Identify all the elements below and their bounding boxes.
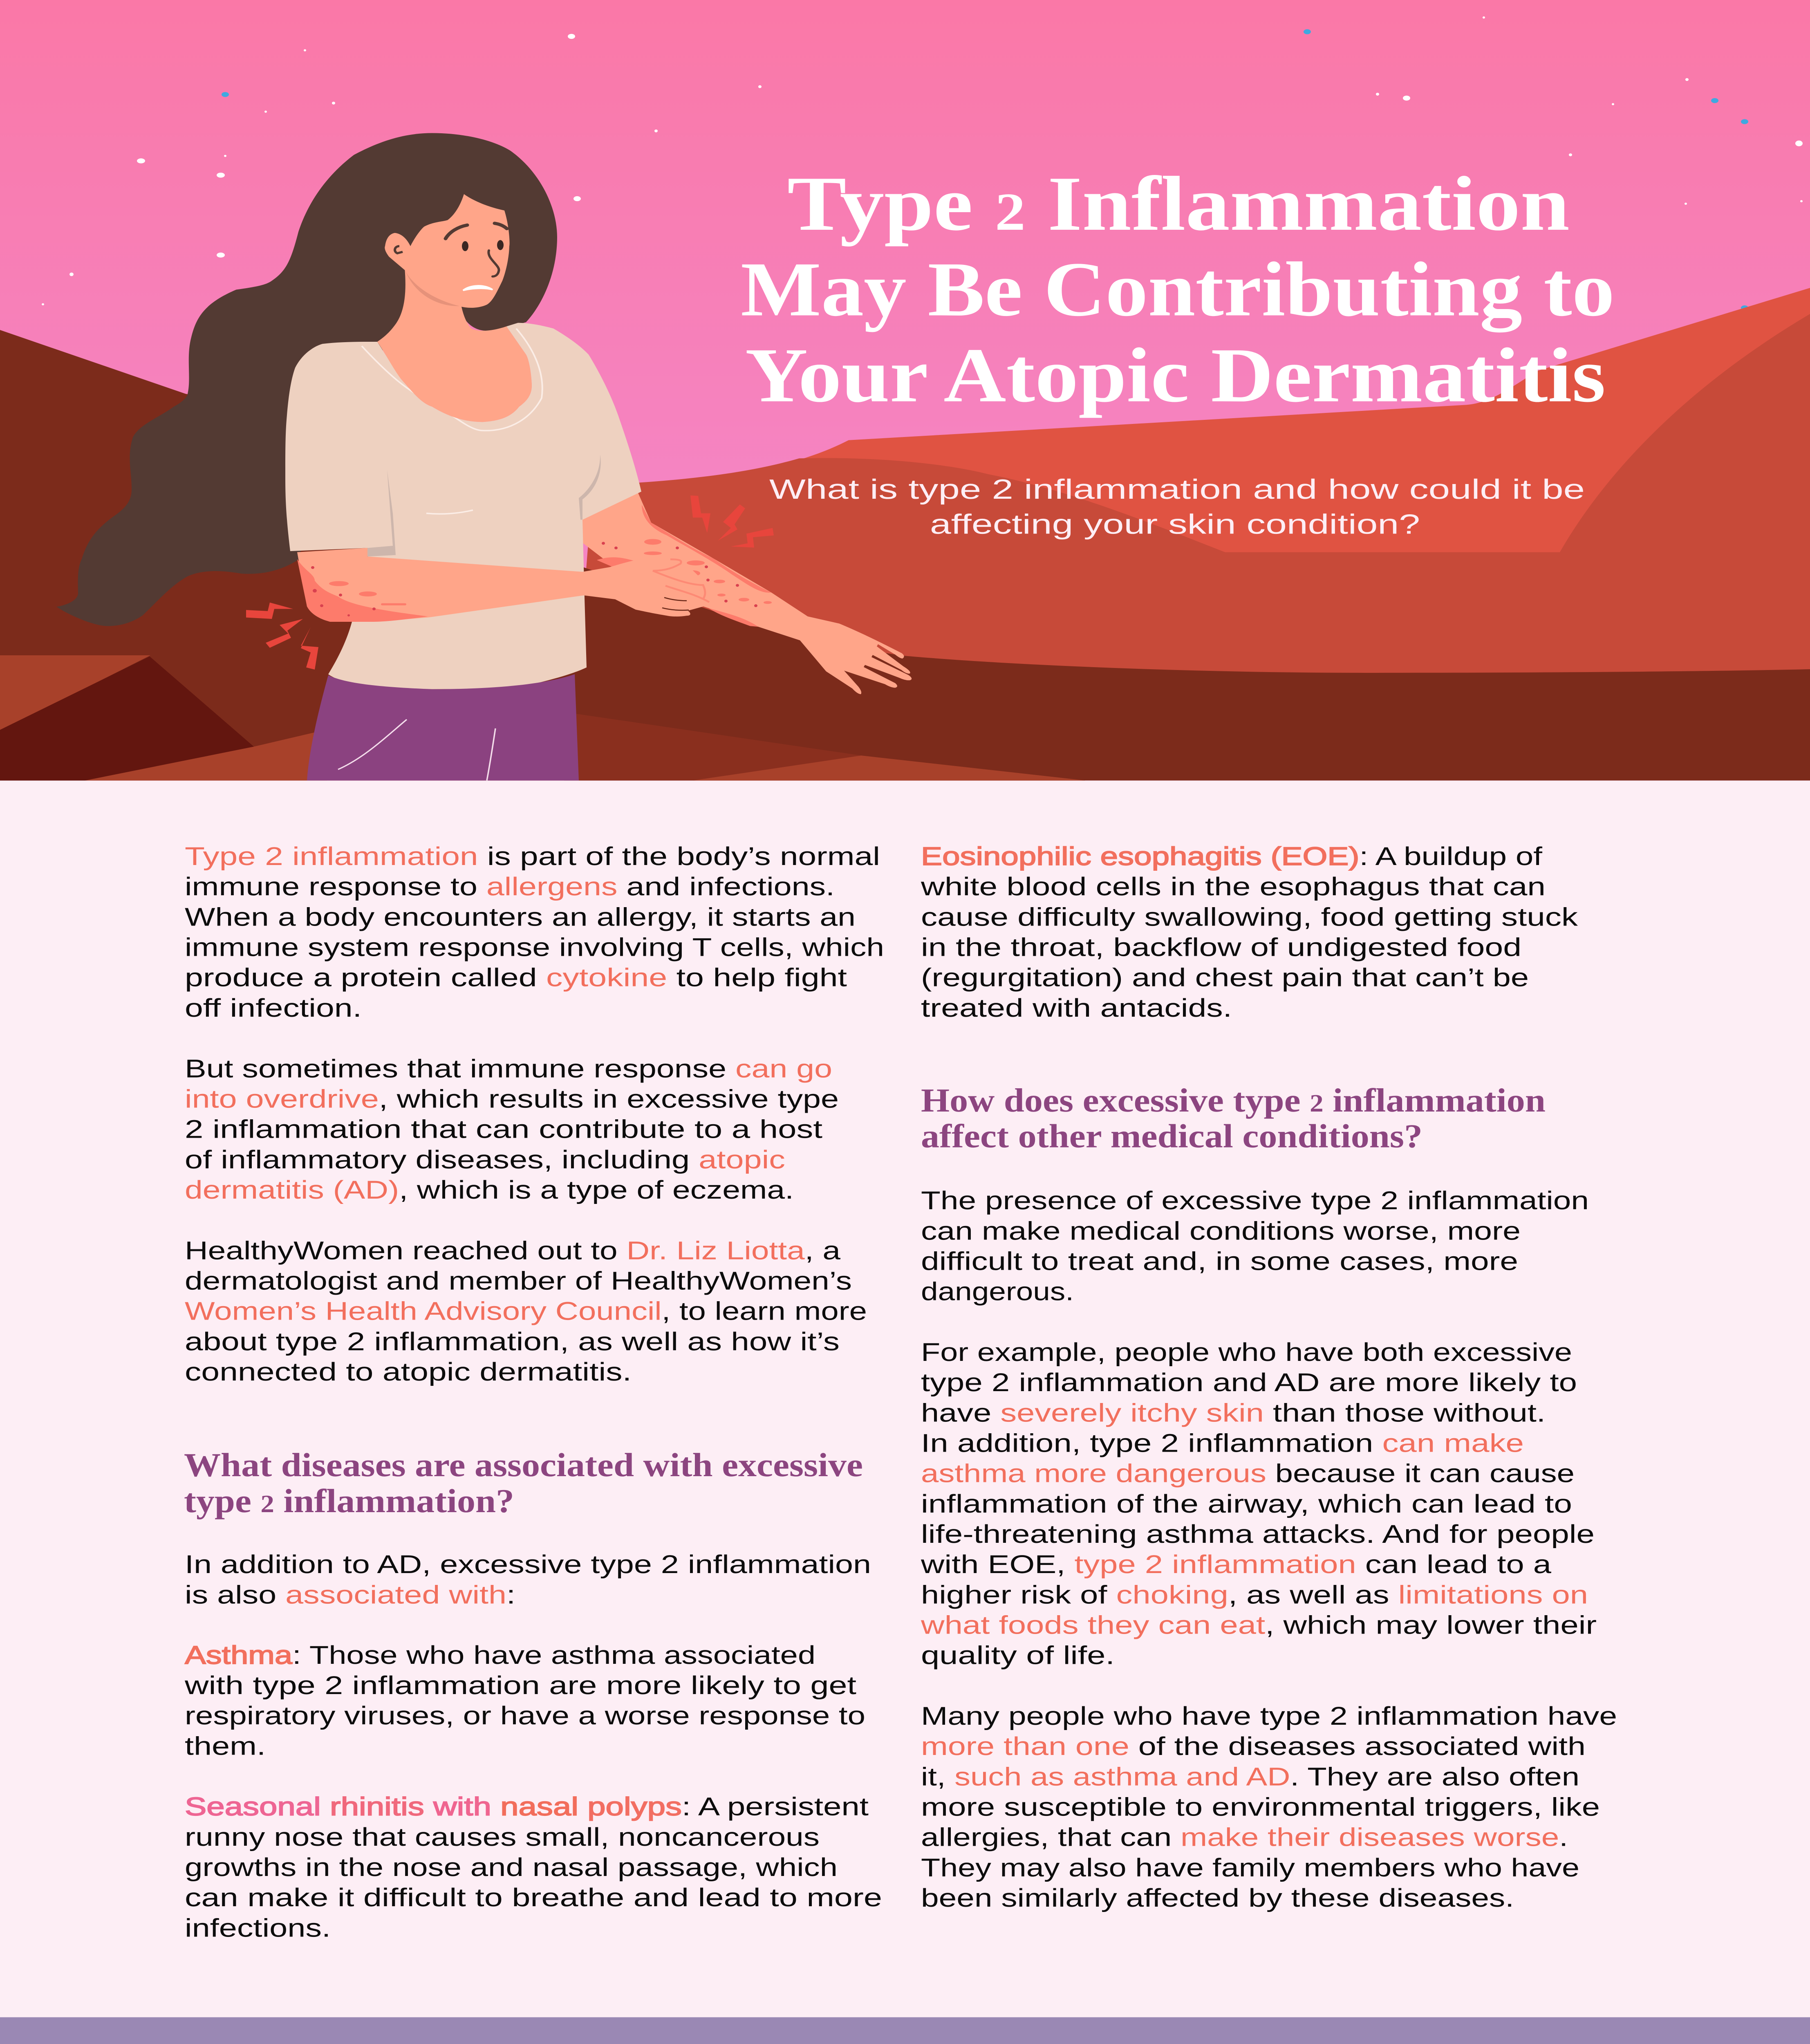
text block: associated with: [185, 1550, 871, 1609]
heading: how does excessive: affect other medical conditions?: [921, 1118, 1422, 1155]
text block: overdrive: [185, 1054, 839, 1204]
heading: what diseases: What diseases are associated with excessive: [184, 1446, 863, 1484]
heading: what diseases: [184, 1446, 863, 1520]
text block: HealthyWomen outreach: connected to atopic dermatitis.: [185, 1358, 632, 1386]
text block: for example: life-threatening asthma attacks. And for people: [921, 1520, 1595, 1549]
text block: seasonal rhinitis: growths in the nose and nasal passage, which: [185, 1853, 838, 1882]
text block: HealthyWomen outreach: HealthyWomen reached out to Dr. Liz Liotta , a: [185, 1236, 841, 1265]
text block: seasonal rhinitis: infections.: [185, 1914, 331, 1942]
text block: seasonal rhinitis: [185, 1793, 882, 1942]
stars: [42, 16, 1803, 310]
heading: how does excessive: How does excessive type 2 inflammation: [921, 1082, 1546, 1119]
text block: overdrive: 2 inflammation that can contribute to a host: [185, 1115, 822, 1144]
eyes: [462, 240, 504, 251]
title: [741, 161, 1615, 419]
title: May Be Contributing to: [741, 247, 1615, 333]
foothill: bright brown left: [0, 655, 150, 731]
finger lines: [653, 559, 709, 602]
text block: many people: [921, 1702, 1617, 1912]
heading: how does excessive: [921, 1082, 1546, 1155]
hair: [56, 133, 557, 626]
text block: seasonal rhinitis: Seasonal rhinitis with nasal polyps : A persistent: [185, 1793, 869, 1821]
arm skin: [297, 548, 711, 622]
shirt shading: [367, 455, 601, 556]
text block: seasonal rhinitis: can make it difficult to breathe and lead to more: [185, 1883, 882, 1912]
text block: associated with: is also associated with :: [185, 1580, 515, 1609]
eyebrows: [446, 223, 507, 239]
text block: for example: [921, 1338, 1597, 1670]
subtitle: What is type 2 inflammation and how could it be: [769, 473, 1585, 505]
text block: what is type 2 inflammation: immune system response involving T cells, which: [185, 933, 884, 962]
text block: for example: In addition, type 2 inflammation can make: [921, 1429, 1524, 1457]
text block: for example: quality of life.: [921, 1641, 1115, 1670]
mountain: red shade: [572, 314, 1810, 749]
text block: the presence: dangerous.: [921, 1278, 1074, 1306]
neck shadow: [405, 271, 459, 306]
face: [385, 194, 510, 308]
footer band: [0, 2017, 1810, 2044]
rash at elbow: [297, 559, 428, 622]
nose: [488, 251, 499, 276]
text block: what is type 2 inflammation: off infection.: [185, 994, 362, 1022]
spots on far arm: [644, 539, 772, 604]
ear detail: [395, 246, 403, 253]
foothill: darkest brown: [0, 657, 254, 780]
text block: asthma: respiratory viruses, or have a worse response to: [185, 1701, 865, 1730]
sky: [0, 0, 1810, 780]
title: Your Atopic Dermatitis: [745, 332, 1606, 419]
mouth: [463, 286, 493, 290]
text block: many people: more than one of the diseases associated with: [921, 1732, 1586, 1761]
text block: what is type 2 inflammation: immune response to allergens and infections.: [185, 872, 835, 901]
spots near elbow: [329, 581, 406, 605]
text block: overdrive: of inflammatory diseases, including atopic: [185, 1145, 785, 1174]
text block: many people: They may also have family members who have: [921, 1853, 1579, 1882]
hero illustration: [0, 0, 1810, 780]
text block: associated with: In addition to AD, excessive type 2 inflammation: [185, 1550, 871, 1579]
text block: eosinophilic esophagitis: white blood cells in the esophagus that can: [921, 872, 1546, 901]
text block: asthma: them.: [185, 1732, 266, 1760]
text block: for example: have severely itchy skin than those without.: [921, 1399, 1546, 1427]
pants white lines: [338, 719, 495, 780]
text block: HealthyWomen outreach: about type 2 inflammation, as well as how it’s: [185, 1327, 840, 1356]
near arm and hand: [297, 548, 711, 622]
subtitle: [769, 473, 1585, 540]
text block: eosinophilic esophagitis: [921, 842, 1578, 1022]
text block: what is type 2 inflammation: Type 2 inflammation is part of the body’s normal: [185, 842, 880, 871]
pain bolts left: [246, 603, 318, 670]
text block: what is type 2 inflammation: When a body encounters an allergy, it starts an: [185, 903, 856, 931]
pain bolts right: [690, 495, 774, 547]
text block: many people: allergies, that can make their diseases worse .: [921, 1823, 1568, 1852]
text block: what is type 2 inflammation: produce a protein called cytokine to help fight: [185, 964, 847, 992]
subtitle: affecting your skin condition?: [930, 508, 1420, 540]
text block: eosinophilic esophagitis: Eosinophilic esophagitis (EOE) : A buildup of: [921, 842, 1543, 871]
text block: eosinophilic esophagitis: in the throat, backflow of undigested food: [921, 933, 1521, 962]
text block: eosinophilic esophagitis: (regurgitation) and chest pain that can’t be: [921, 964, 1529, 992]
woman: [56, 133, 912, 780]
text block: overdrive: But sometimes that immune response can go: [185, 1054, 832, 1083]
text block: asthma: [184, 1641, 865, 1760]
rash on far arm: [597, 505, 771, 627]
text block: the presence: difficult to treat and, in some cases, more: [921, 1247, 1518, 1275]
text block: for example: higher risk of choking , as well as limitations on: [921, 1580, 1588, 1609]
text block: for example: inflammation of the airway, which can lead to: [921, 1490, 1572, 1518]
text block: for example: type 2 inflammation and AD are more likely to: [921, 1368, 1577, 1397]
text block: for example: For example, people who have both excessive: [921, 1338, 1572, 1367]
mountain: bright red: [613, 288, 1810, 749]
text block: HealthyWomen outreach: dermatologist and member of HealthyWomen’s: [185, 1267, 852, 1295]
shirt white lines: [362, 329, 542, 514]
text block: seasonal rhinitis: runny nose that causes small, noncancerous: [185, 1823, 820, 1851]
text block: for example: asthma more dangerous because it can cause: [921, 1459, 1575, 1488]
text block: many people: been similarly affected by these diseases.: [921, 1884, 1514, 1912]
foothill: mid brown: [564, 712, 1085, 780]
heading: what diseases: type 2 inflammation?: [184, 1483, 514, 1520]
text block: for example: what foods they can eat , which may lower their: [921, 1611, 1597, 1639]
text block: HealthyWomen outreach: [185, 1236, 867, 1386]
far arm: [580, 490, 912, 694]
text block: eosinophilic esophagitis: cause difficulty swallowing, food getting stuck: [921, 903, 1578, 931]
text block: many people: Many people who have type 2 inflammation have: [921, 1702, 1617, 1730]
title: Type 2 Inflammation: [787, 161, 1570, 247]
text block: the presence: can make medical conditions worse, more: [921, 1217, 1521, 1245]
mountain: dark brown foreground: [0, 330, 1810, 780]
neck and chest skin: [377, 268, 532, 422]
text block: the presence: The presence of excessive type 2 inflammation: [921, 1186, 1589, 1215]
text block: overdrive: dermatitis (AD) , which is a type of eczema.: [185, 1176, 794, 1204]
text block: the presence: [921, 1186, 1589, 1306]
foothill: bright brown right: [693, 755, 1085, 780]
text block: overdrive: into overdrive , which results in excessive type: [185, 1085, 839, 1113]
arm and hand skin: [580, 490, 912, 694]
shirt: [285, 323, 641, 689]
text block: many people: more susceptible to environmental triggers, like: [921, 1793, 1600, 1821]
text block: what is type 2 inflammation: [185, 842, 884, 1022]
text block: asthma: with type 2 inflammation are more likely to get: [184, 1671, 856, 1700]
text block: for example: with EOE, type 2 inflammation can lead to a: [921, 1550, 1552, 1579]
text block: HealthyWomen outreach: Women’s Health Advisory Council , to learn more: [185, 1297, 867, 1326]
text block: asthma: Asthma : Those who have asthma associated: [185, 1641, 815, 1670]
text block: eosinophilic esophagitis: treated with antacids.: [921, 994, 1232, 1022]
pants: [307, 674, 579, 780]
text block: many people: it, such as asthma and AD . They are also often: [921, 1763, 1579, 1791]
